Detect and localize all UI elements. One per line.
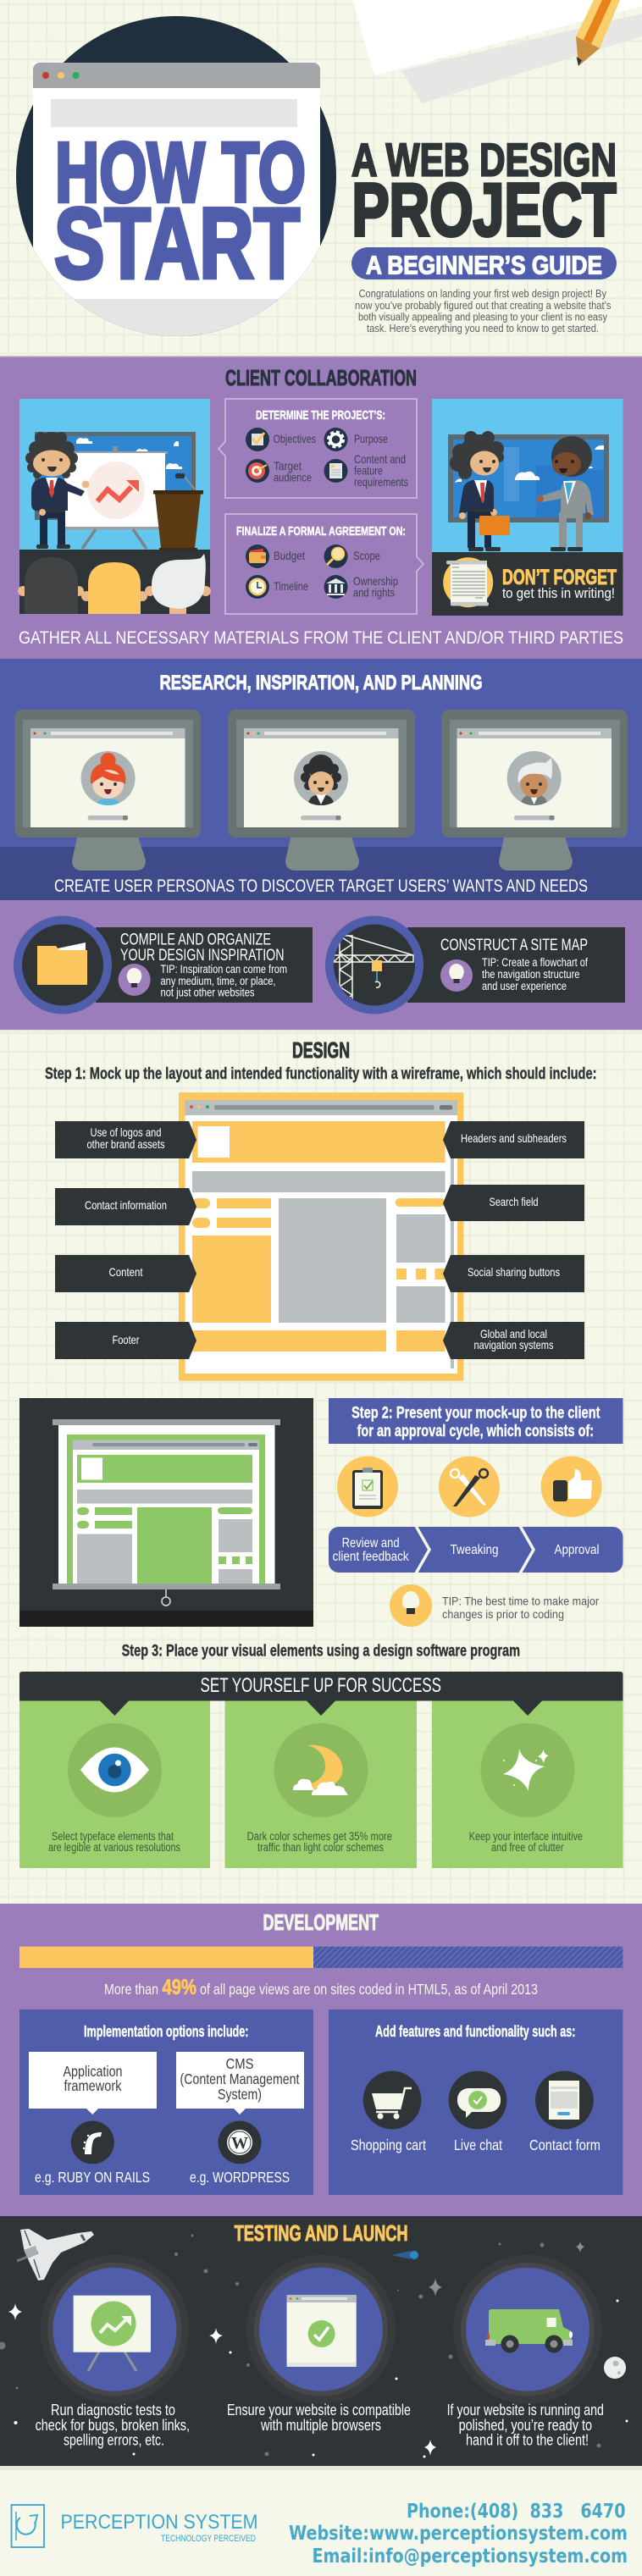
callout labels: Global and local — [480, 1327, 547, 1341]
tip text: any medium, time, or place, — [161, 975, 276, 987]
box: finalize a formal agreement — [225, 514, 423, 614]
icon: budget — [246, 544, 269, 568]
icon: target audience — [246, 459, 269, 483]
tip: best time: TIP: The best time to make major — [442, 1594, 599, 1607]
icon: scope — [324, 544, 347, 568]
speech box: cms: System) — [218, 2086, 262, 2103]
callout labels: Contact information — [85, 1198, 167, 1212]
panel: testing and launch — [0, 2216, 642, 2470]
icon: scissors — [439, 1457, 500, 1517]
step 3 heading: Step 3: Place your visual elements using a design software program — [122, 1642, 520, 1661]
approval cycle arrow bar: Review and — [342, 1536, 400, 1551]
card: construct site map — [325, 916, 625, 1014]
text: hand it off — [447, 2402, 604, 2449]
monitor: persona three — [441, 710, 628, 871]
label: budget: Budget — [274, 549, 305, 562]
icon: timeline — [246, 575, 269, 599]
text: ensure compatible: with multiple browsers — [260, 2417, 381, 2434]
text: run diagnostic tests: check for bugs, broken links, — [36, 2417, 190, 2434]
panel: client collaboration — [0, 356, 642, 659]
progress bar: 49% — [19, 1947, 623, 1968]
text: run diagnostic tests: spelling errors, etc. — [64, 2432, 164, 2449]
icon: folder — [37, 943, 87, 985]
callout labels: Use of logos and — [90, 1125, 161, 1139]
icon: live chat — [449, 2071, 506, 2129]
card text: Dark color schemes get 35% more — [247, 1830, 392, 1843]
label: target audience: Target — [274, 459, 302, 473]
tip text: and user experience — [482, 980, 567, 992]
label: ownership and rights: and rights — [353, 586, 395, 600]
subtitle pill: A BEGINNER’S GUIDE — [366, 251, 602, 279]
callout labels: other brand assets — [86, 1137, 164, 1151]
callout labels: Footer — [112, 1333, 140, 1346]
label: target audience — [274, 459, 312, 484]
label: purpose: Purpose — [354, 432, 388, 445]
text: ensure compatible: Ensure your website is compatible — [227, 2402, 411, 2418]
callout labels: Headers and subheaders — [461, 1131, 567, 1145]
card text: and free of clutter — [491, 1841, 564, 1854]
speech box: cms — [176, 2052, 304, 2114]
statistic: 49 percent: of all page views are on sites coded in HTML5, as of April 2013 — [200, 1981, 538, 1998]
callout labels: Social sharing buttons — [468, 1265, 560, 1279]
label: target audience: audience — [274, 471, 312, 484]
icon: eye — [80, 1748, 149, 1792]
intro paragraph: Congratulations on landing your first web design project! By — [359, 288, 607, 300]
callouts: right — [443, 1121, 584, 1359]
presenter — [25, 432, 90, 549]
icon: wordpress: W — [231, 2134, 248, 2153]
icon: purpose — [324, 428, 347, 451]
partner in grey suit — [537, 436, 594, 551]
callout labels: Search field — [490, 1195, 539, 1208]
wordmark — [61, 2511, 257, 2544]
box: determine the project's: DETERMINE THE PROJECT’S: — [256, 409, 385, 423]
example labels — [35, 2169, 290, 2186]
icon: space shuttle — [17, 2229, 94, 2280]
feature labels — [351, 2137, 600, 2153]
card text: Keep your interface intuitive — [469, 1830, 583, 1843]
panel: inspiration and site map — [0, 900, 642, 1031]
paper sheet — [352, 0, 642, 103]
speech box: application framework: framework — [64, 2077, 122, 2094]
box: determine the project's — [219, 399, 417, 498]
header — [0, 0, 642, 341]
heading: COMPILE AND ORGANIZE — [120, 931, 271, 948]
porthole: browsers — [246, 2255, 396, 2404]
box: finalize a formal agreement: FINALIZE A FORMAL AGREEMENT ON: — [236, 525, 406, 539]
icon: contact form — [535, 2071, 594, 2129]
porthole: delivery van — [453, 2255, 602, 2404]
tip: best time — [390, 1584, 599, 1627]
tip text: the navigation structure — [482, 968, 579, 981]
tip text — [161, 963, 287, 999]
label: timeline: Timeline — [274, 579, 308, 593]
approval cycle arrow bar: Approval — [554, 1543, 600, 1557]
card: intuitive interface — [432, 1700, 623, 1868]
approval cycle arrow bar — [329, 1526, 623, 1573]
approval cycle arrow bar: Tweaking — [451, 1543, 498, 1557]
callout labels — [85, 1125, 567, 1352]
monitor: persona one — [14, 710, 201, 871]
callouts: left — [55, 1121, 196, 1359]
callout: don't forget — [502, 566, 617, 601]
title: how to start: START — [54, 188, 300, 300]
intro paragraph: both visually appealing and pleasing to your client is no easy — [358, 312, 608, 323]
banner: set yourself up for success — [19, 1672, 623, 1700]
icon: crane — [334, 936, 413, 1003]
text: run diagnostic tests — [36, 2402, 190, 2449]
heading: DESIGN — [292, 1037, 350, 1063]
banner: set yourself up for success: SET YOURSELF UP FOR SUCCESS — [200, 1674, 441, 1697]
step 2 heading — [329, 1398, 623, 1444]
title: how to start — [54, 125, 306, 300]
heading: RESEARCH, INSPIRATION, AND PLANNING — [159, 672, 483, 694]
text: hand it off: If your website is running and — [447, 2402, 604, 2418]
title: a web design project — [351, 134, 617, 252]
card text — [469, 1830, 583, 1854]
icon: ownership — [324, 575, 347, 599]
panel: implementation options: Implementation options include: — [84, 2023, 249, 2040]
label: content and feature requirements: requirements — [354, 475, 408, 489]
icon: clipboard — [337, 1457, 398, 1517]
heading: YOUR DESIGN INSPIRATION — [120, 947, 285, 965]
card: dark color schemes — [225, 1700, 417, 1868]
browser window circle — [16, 16, 336, 336]
monitor: persona two — [228, 710, 415, 871]
card text: traffic than light color schemes — [257, 1841, 384, 1854]
icon: ruby on rails — [71, 2120, 114, 2164]
feature labels: Contact form — [529, 2137, 600, 2153]
panel: design — [19, 1037, 623, 1868]
wireframe — [179, 1092, 464, 1381]
approval cycle arrow bar: client feedback — [333, 1550, 409, 1564]
card: legible type — [19, 1700, 210, 1868]
logo mark — [12, 2505, 44, 2547]
feature labels: Shopping cart — [351, 2137, 426, 2153]
panel: development — [0, 1904, 642, 2216]
label: content and feature requirements: feature — [354, 464, 383, 478]
text: hand it off: hand it off to the client! — [466, 2432, 589, 2449]
intro paragraph: now you’ve probably figured out that creating a website that’s — [355, 300, 612, 312]
icon: shopping cart — [363, 2071, 421, 2129]
icon: pencil — [576, 0, 620, 66]
callout labels: navigation systems — [474, 1338, 554, 1352]
speech box: application framework: Application — [63, 2063, 122, 2080]
speech box: application framework — [29, 2052, 157, 2114]
statistic: 49 percent: 49% — [163, 1976, 196, 1999]
scene: handshake and reminder — [432, 399, 623, 616]
client in navy suit — [450, 431, 510, 551]
tip: best time: changes is prior to coding — [442, 1607, 564, 1621]
example labels: e.g. RUBY ON RAILS — [35, 2169, 150, 2186]
podium — [153, 473, 203, 550]
text: run diagnostic tests: Run diagnostic tests to — [51, 2402, 175, 2418]
tip text: TIP: Create a flowchart of — [482, 956, 588, 969]
panel: research, inspiration, and planning — [0, 659, 642, 900]
card text — [247, 1830, 392, 1854]
scene: presenter and audience — [18, 399, 211, 614]
callout: don't forget: to get this in writing! — [502, 586, 615, 601]
footer — [0, 2470, 642, 2576]
label: content and feature requirements — [354, 452, 408, 489]
speech box: cms: CMS — [225, 2055, 254, 2072]
icon: moon — [604, 2357, 626, 2379]
icon: thumbs up — [541, 1457, 602, 1517]
icon: light bulb — [119, 964, 151, 996]
porthole: diagnostic tests — [40, 2255, 189, 2404]
icon: content — [324, 459, 347, 483]
contact details — [289, 2501, 628, 2568]
icon: comet — [391, 2251, 418, 2259]
audience heads — [18, 554, 211, 614]
feature labels: Live chat — [454, 2137, 502, 2153]
heading: DEVELOPMENT — [263, 1910, 379, 1935]
heading: CLIENT COLLABORATION — [225, 365, 417, 390]
card text — [48, 1830, 180, 1854]
label: scope: Scope — [353, 549, 380, 562]
speech box: cms: (Content Management — [180, 2070, 300, 2087]
wordmark: TECHNOLOGY PERCEIVED — [161, 2534, 256, 2544]
panel: features and functionality — [329, 2009, 623, 2195]
label: objectives: Objectives — [273, 432, 316, 445]
icon: written agreement — [443, 557, 493, 607]
text: ensure compatible — [227, 2402, 411, 2434]
panel: implementation options — [19, 2009, 313, 2195]
icon: objectives — [246, 428, 269, 451]
callout labels: Content — [108, 1265, 143, 1279]
icon: light bulb — [440, 959, 473, 992]
title: how to start: HOW TO — [55, 125, 306, 220]
heading: CONSTRUCT A SITE MAP — [440, 937, 588, 954]
label: content and feature requirements: Content and — [354, 452, 406, 466]
starfield — [0, 2234, 628, 2457]
example labels: e.g. WORDPRESS — [190, 2169, 290, 2186]
intro paragraph — [355, 288, 612, 334]
statistic: 49 percent — [104, 1976, 538, 1999]
icon: wordpress — [219, 2120, 261, 2164]
intro paragraph: task. Here’s everything you need to know to get started. — [367, 323, 599, 334]
icon: moon and clouds — [293, 1745, 348, 1795]
tip text: TIP: Inspiration can come from — [161, 963, 287, 976]
statistic: 49 percent: More than — [104, 1981, 158, 1998]
projector mock-up — [19, 1398, 313, 1627]
card text: are legible at various resolutions — [48, 1841, 180, 1854]
wordmark: PERCEPTION SYSTEM — [61, 2511, 257, 2534]
tip text: not just other websites — [161, 986, 255, 999]
label: ownership and rights: Ownership — [353, 574, 398, 588]
label: ownership and rights — [353, 574, 398, 600]
tip text — [482, 956, 588, 992]
heading: TESTING AND LAUNCH — [235, 2220, 408, 2246]
icon: sparkle — [503, 1750, 549, 1791]
card text: Select typeface elements that — [52, 1830, 174, 1843]
text: hand it off: polished, you’re ready to — [459, 2417, 592, 2434]
heading — [120, 931, 285, 965]
card: compile inspiration — [14, 916, 313, 1014]
